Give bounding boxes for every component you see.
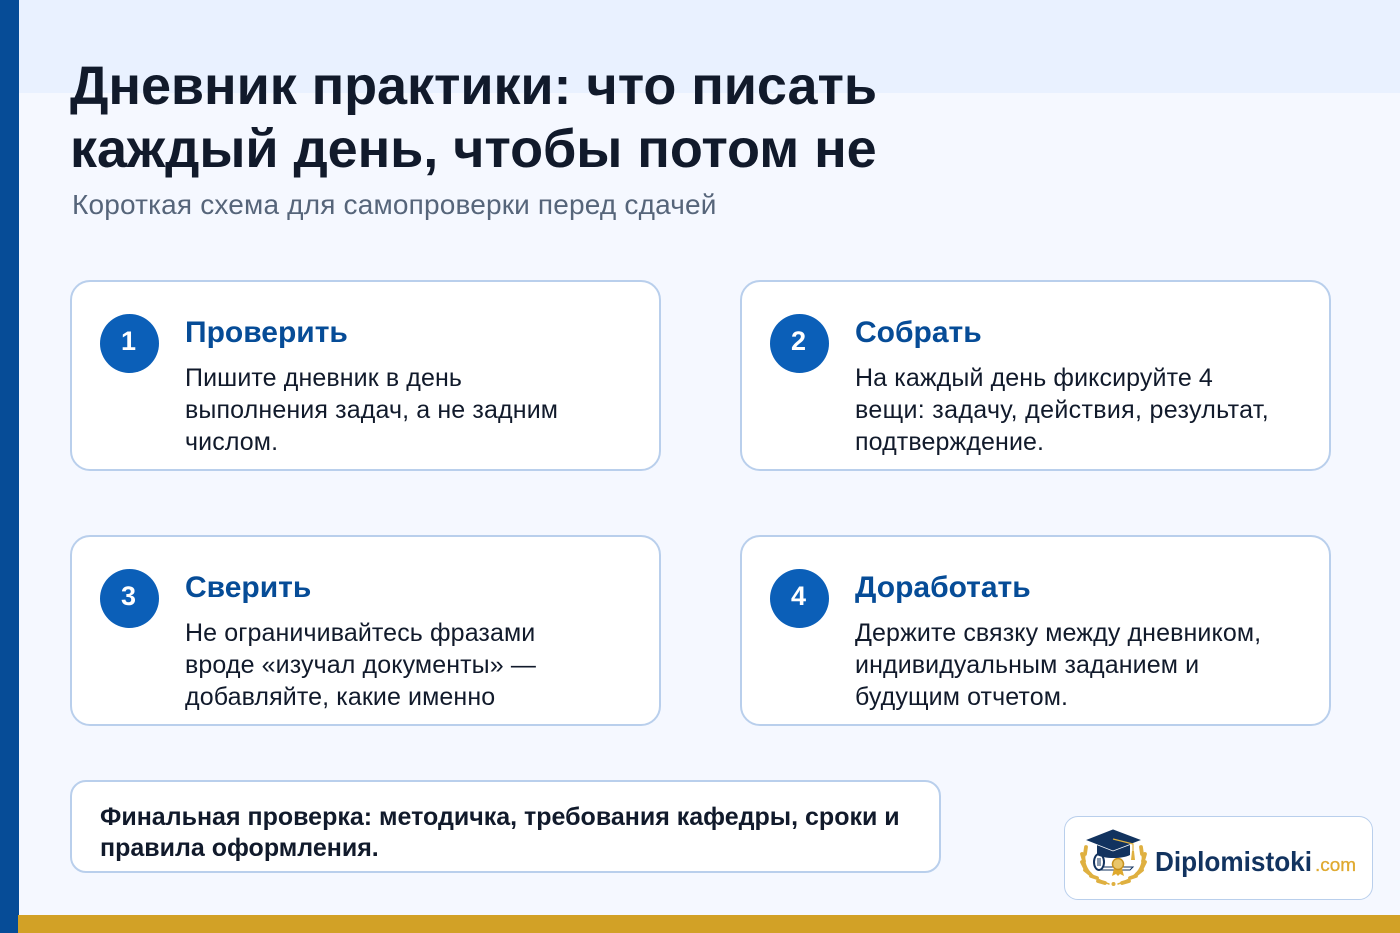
logo card (1064, 816, 1373, 900)
title (70, 56, 877, 179)
step 3 text: Не ограничивайтесь фразами (185, 619, 535, 647)
step 4 text: Держите связку между дневником, (855, 619, 1261, 647)
step 4 text: индивидуальным заданием и (855, 651, 1199, 679)
step 2 text: На каждый день фиксируйте 4 (855, 364, 1213, 392)
step 2 heading: Собрать (855, 316, 982, 349)
step 3 text: вроде «изучал документы» — (185, 651, 536, 679)
icon: laurel wreath (1082, 847, 1145, 886)
title: каждый день, чтобы потом не (70, 119, 877, 179)
step 4 text (855, 619, 1261, 711)
logo domain: .com (1315, 855, 1356, 875)
step 3 text (185, 619, 536, 711)
step 3 text: добавляйте, какие именно (185, 683, 495, 711)
callout: final check (70, 780, 941, 873)
step 4 heading: Доработать (855, 571, 1031, 604)
panel: step 3 (70, 535, 661, 726)
title: Дневник практики: что писать (70, 56, 877, 116)
step 1 text: Пишите дневник в день (185, 364, 462, 392)
callout: final check: Финальная проверка: методичка, требования кафедры, сроки и (100, 803, 900, 831)
step 1 text (185, 364, 558, 456)
step 4 number (770, 569, 829, 628)
left accent bar (0, 0, 19, 933)
callout: final check: правила оформления. (100, 834, 379, 862)
logo wordmark: Diplomistoki (1155, 846, 1312, 877)
step 3 number: 3 (121, 581, 136, 611)
bottom accent bar (18, 915, 1400, 933)
step 2 number: 2 (791, 326, 806, 356)
panel: step 4 (740, 535, 1331, 726)
step 2 text: вещи: задачу, действия, результат, (855, 396, 1269, 424)
step 4 number: 4 (791, 581, 806, 611)
step 3 heading: Сверить (185, 571, 311, 604)
step 2 number (770, 314, 829, 373)
step 3 number (100, 569, 159, 628)
panel: step 1 (70, 280, 661, 471)
step 1 number (100, 314, 159, 373)
step 4 text: будущим отчетом. (855, 683, 1068, 711)
icon: diploma scroll (1094, 854, 1133, 876)
step 2 text (855, 364, 1269, 456)
logo (1080, 830, 1356, 886)
subtitle: Короткая схема для самопроверки перед сдачей (72, 189, 717, 220)
top header band (18, 0, 1400, 93)
panel: step 2 (740, 280, 1331, 471)
icon: graduation cap (1085, 829, 1142, 860)
step 2 text: подтверждение. (855, 428, 1044, 456)
step 1 text: выполнения задач, а не задним (185, 396, 558, 424)
step 1 text: числом. (185, 428, 278, 456)
step 1 number: 1 (121, 326, 136, 356)
step 1 heading: Проверить (185, 316, 348, 349)
